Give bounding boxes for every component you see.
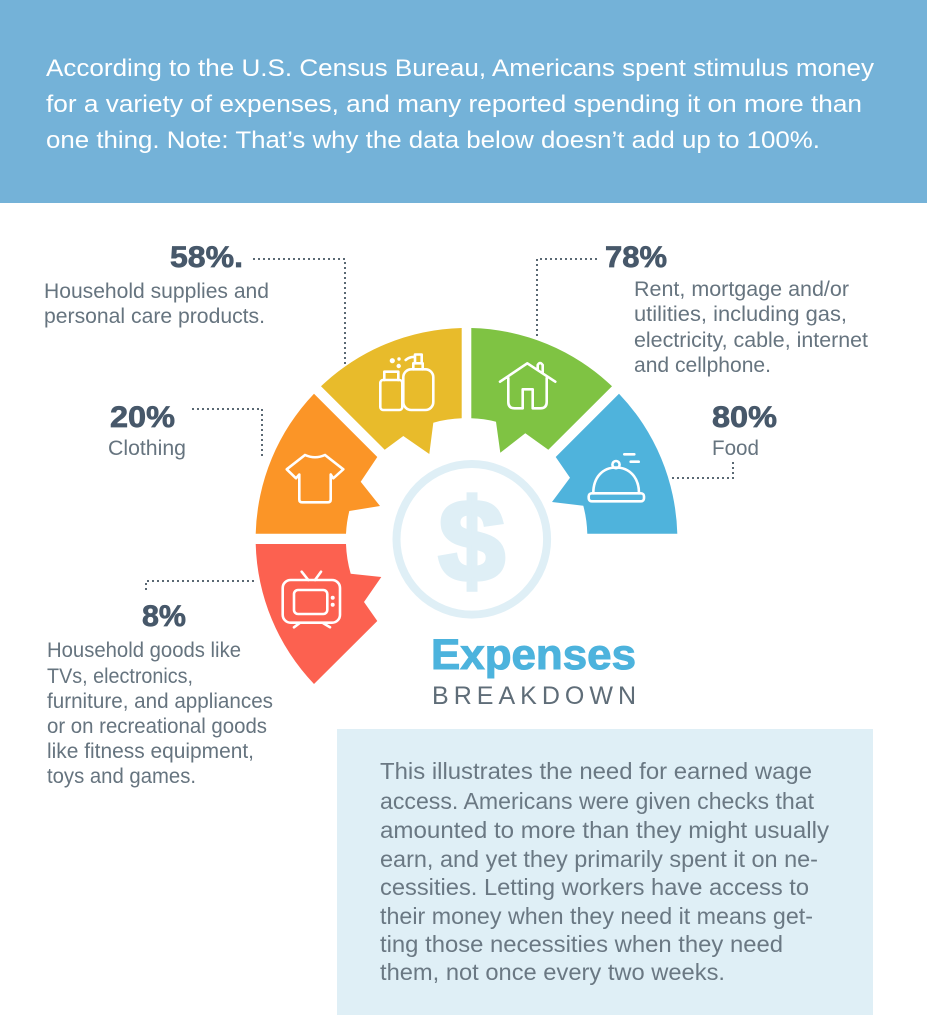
callout: 78% rent and utilities: 78% — [605, 241, 667, 274]
panel: earned wage access note — [337, 729, 873, 1015]
icon: dollar coin — [396, 464, 547, 615]
callout: 8% household goods: furniture, and appliances — [47, 689, 273, 713]
callout: 78% rent and utilities — [605, 241, 868, 377]
note text: cessities. Letting workers have access to — [380, 874, 809, 900]
title: BREAKDOWN — [432, 682, 636, 710]
header text: According to the U.S. Census Bureau, Americans spent stimulus money — [46, 55, 875, 82]
leader line: 20% — [192, 409, 262, 457]
callout: 78% rent and utilities: and cellphone. — [634, 353, 771, 377]
note text: This illustrates the need for earned wage — [380, 758, 812, 784]
callout: 8% household goods: like fitness equipment, — [47, 739, 254, 763]
icon: bottles — [380, 354, 433, 410]
segment: food — [552, 394, 677, 534]
note text: access. Americans were given checks that — [380, 788, 814, 814]
segment: household supplies — [321, 328, 462, 454]
callout: 8% household goods: 8% — [142, 600, 186, 633]
note text: their money when they need it means get- — [380, 903, 813, 929]
callout: 58% household supplies — [44, 241, 269, 328]
callout: 8% household goods: TVs, electronics, — [47, 664, 193, 688]
note text: them, not once every two weeks. — [380, 959, 725, 985]
callout: 20% clothing: 20% — [110, 401, 175, 434]
note text: ting those necessities when they need — [380, 931, 783, 957]
callout: 8% household goods — [47, 600, 273, 788]
icon: television — [283, 572, 340, 627]
title — [431, 631, 636, 710]
header text: one thing. Note: That’s why the data below doesn’t add up to 100%. — [46, 127, 820, 154]
callout: 8% household goods: Household goods like — [47, 638, 241, 662]
callout: 78% rent and utilities: electricity, cable, internet — [634, 328, 868, 352]
icon: house — [500, 363, 555, 408]
callout: 8% household goods: toys and games. — [47, 764, 196, 788]
segment: clothing — [256, 394, 380, 534]
leader line: 8% — [146, 581, 254, 593]
callout: 8% household goods: or on recreational goods — [47, 714, 267, 738]
leader line: 78% — [537, 259, 597, 338]
note text: earn, and yet they primarily spent it on ne- — [380, 846, 818, 872]
callout: 78% rent and utilities: Rent, mortgage and/or — [634, 277, 849, 301]
callout: 58% household supplies: 58%. — [170, 241, 243, 274]
icon: dollar coin: $ — [439, 476, 505, 606]
segment: rent and utilities — [471, 328, 612, 453]
callout: 58% household supplies: personal care products. — [44, 304, 265, 328]
leader line: 58% — [253, 259, 345, 365]
callout: 58% household supplies: Household supplies and — [44, 279, 269, 303]
callout: 20% clothing — [108, 401, 186, 460]
note text: amounted to more than they might usually — [380, 817, 829, 843]
header panel — [0, 0, 927, 203]
semicircle chart — [256, 328, 677, 684]
header text — [46, 55, 875, 154]
leader line: 80% — [672, 462, 733, 478]
callout: 78% rent and utilities: utilities, including gas, — [634, 302, 847, 326]
icon: cloche — [589, 454, 644, 501]
icon: t-shirt — [287, 455, 343, 502]
callout: 80% food: 80% — [712, 401, 777, 434]
callout: 20% clothing: Clothing — [108, 436, 186, 460]
segment: household goods — [256, 544, 381, 684]
header text: for a variety of expenses, and many reported spending it on more than — [46, 91, 862, 118]
callout: 80% food — [712, 401, 777, 460]
note text — [380, 758, 829, 985]
title: Expenses — [431, 631, 636, 679]
callout: 80% food: Food — [712, 436, 759, 460]
